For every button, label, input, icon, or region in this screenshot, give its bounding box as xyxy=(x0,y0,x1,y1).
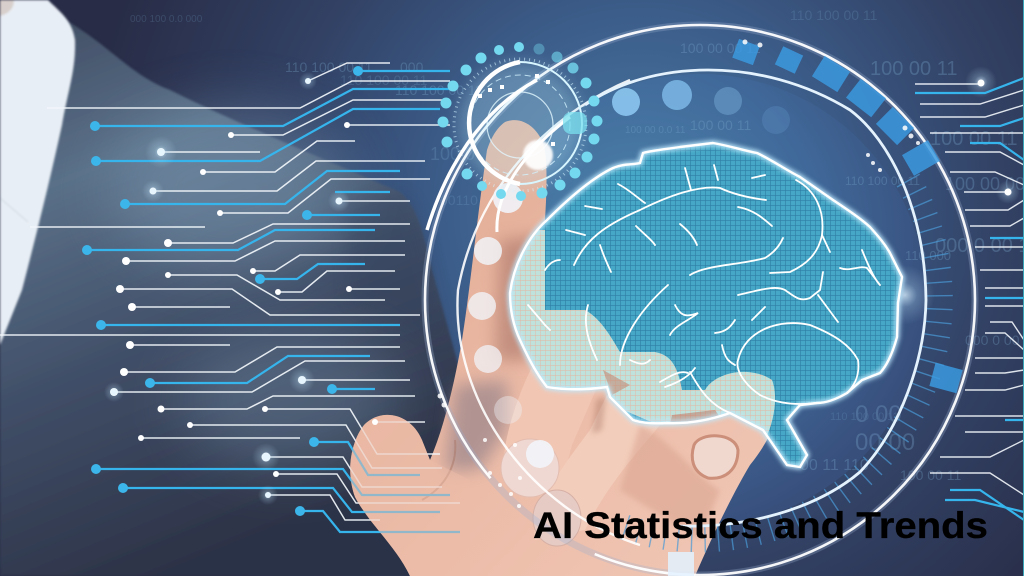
binary code background text: 110 100 00 11 xyxy=(790,7,878,23)
fingernail: ring finger xyxy=(533,490,581,546)
binary code background text: 000 100 0.0 000 xyxy=(130,14,203,25)
circuit lines right xyxy=(915,0,1024,576)
binary code background text: 100 00 00 xyxy=(945,174,1024,194)
binary code background text: 110 100 00 11 xyxy=(845,174,920,188)
binary code background text: 00 11 110 xyxy=(800,457,869,474)
hud rings xyxy=(425,25,975,575)
tick marks on ring xyxy=(618,180,940,539)
binary code background text: 110 100 00 11 xyxy=(340,72,428,88)
middle finger xyxy=(503,362,598,497)
binary code background text: 100 00 00 11 xyxy=(680,40,761,56)
fingertip target dial xyxy=(427,42,602,232)
binary code background text: 000 100 0.0 11 xyxy=(60,213,133,225)
circuit lines left: blue xyxy=(87,71,460,532)
palm shading xyxy=(620,425,720,540)
brain glow outline xyxy=(510,143,902,467)
binary code background text: 0 00 xyxy=(855,401,902,428)
binary code background text: 100 0 xyxy=(430,144,475,164)
binary code background text: 110 100 00 11 xyxy=(830,411,899,423)
binary code background text: 100 00 110 000 xyxy=(200,546,289,561)
binary code background text: 100 00 0.0 11 xyxy=(625,125,686,136)
circuit nodes xyxy=(82,66,363,516)
thumb veil over circuit lines xyxy=(350,415,470,576)
suit xyxy=(0,18,480,576)
binary code background text: 000 00 11 xyxy=(365,389,413,401)
hand xyxy=(350,120,780,576)
title: AI Statistics and Trends xyxy=(533,505,988,546)
binary code background text: 110 100 00 11 xyxy=(395,82,483,98)
finger gap shadow xyxy=(592,396,606,434)
binary code background text: 00 00 xyxy=(855,429,915,456)
binary code background text: 100 00 11 xyxy=(930,128,1018,150)
binary code background text: 000 100 00 110 00 xyxy=(180,533,287,548)
thumb crease xyxy=(422,440,455,500)
top translucent circles xyxy=(612,80,790,134)
brain outline xyxy=(510,143,902,467)
binary code background text: 100 00 11 xyxy=(690,117,751,133)
binary code background text: 100 00 11 xyxy=(900,467,961,483)
ring finger xyxy=(534,395,660,540)
brain xyxy=(505,140,905,470)
binary code background text: 000 100 11 xyxy=(130,196,184,208)
fingernail: pinky xyxy=(692,436,738,478)
suit highlight xyxy=(110,110,350,270)
brain folds xyxy=(528,165,880,413)
small dots xyxy=(438,40,920,508)
binary code background text: 100 00 11 xyxy=(870,58,958,80)
hand seen through brain xyxy=(505,230,775,440)
shirt collar xyxy=(0,0,75,345)
white dots arc over finger xyxy=(468,183,554,468)
circuit lines left: white xyxy=(0,63,460,520)
index finger shading xyxy=(495,235,544,362)
back of hand through suit xyxy=(445,380,507,470)
binary code background text: 000 xyxy=(400,59,424,75)
radar disc behind the brain xyxy=(474,74,926,526)
ring squares xyxy=(668,39,963,576)
binary code background text: 110 100 00 11 xyxy=(285,59,373,75)
light sparks xyxy=(104,66,1020,505)
fingernail: middle finger xyxy=(501,439,559,497)
binary code background text: 00110 xyxy=(440,192,478,208)
binary code background text: 110 000 xyxy=(905,248,951,263)
